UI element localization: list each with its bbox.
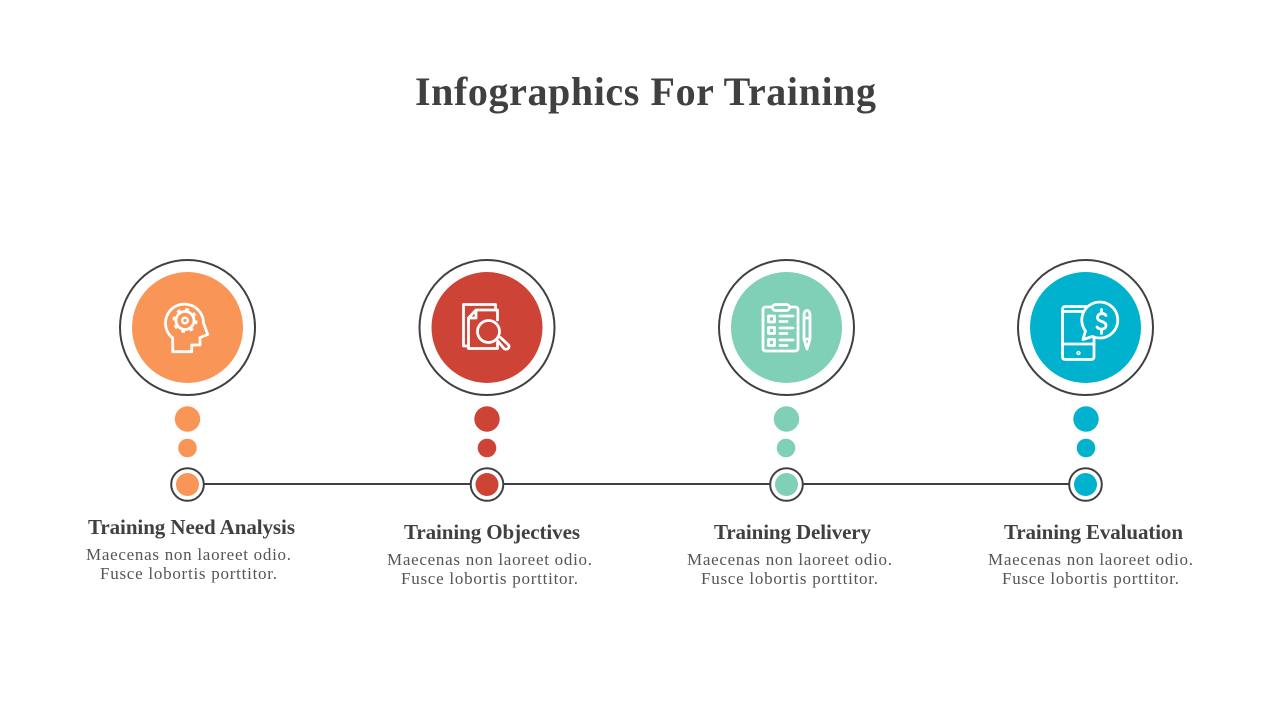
step 4: training evaluation xyxy=(988,260,1193,588)
heading: Training Objectives xyxy=(404,520,580,544)
description: Fusce lobortis porttitor. xyxy=(401,569,578,588)
description: Fusce lobortis porttitor. xyxy=(1002,569,1179,588)
step 1: training need analysis xyxy=(86,260,295,583)
heading: Training Delivery xyxy=(714,520,872,544)
description: Maecenas non laoreet odio. xyxy=(86,545,291,564)
timeline node xyxy=(1069,468,1102,501)
step 3: training delivery xyxy=(687,260,892,588)
description: Maecenas non laoreet odio. xyxy=(387,550,592,569)
heading: Training Need Analysis xyxy=(88,515,295,539)
heading: Training Evaluation xyxy=(1004,520,1183,544)
timeline line xyxy=(187,483,1086,485)
description: Maecenas non laoreet odio. xyxy=(988,550,1193,569)
description xyxy=(988,550,1193,588)
description xyxy=(86,545,291,583)
timeline node xyxy=(171,468,204,501)
icon: documents with magnifier xyxy=(464,304,509,349)
connector dots xyxy=(774,406,799,457)
timeline node xyxy=(471,468,503,501)
description xyxy=(387,550,592,588)
icon circle: green xyxy=(719,260,854,395)
icon circle: red xyxy=(420,260,554,395)
step 2: training objectives xyxy=(387,260,592,588)
icon: phone with dollar bubble xyxy=(1062,302,1118,360)
connector dots xyxy=(175,406,200,457)
title: Infographics For Training xyxy=(415,69,876,114)
description xyxy=(687,550,892,588)
timeline node xyxy=(770,468,803,501)
icon: clipboard and pencil xyxy=(763,304,810,351)
icon: head with gear xyxy=(166,304,208,352)
icon circle: orange xyxy=(120,260,255,395)
description: Maecenas non laoreet odio. xyxy=(687,550,892,569)
icon circle: blue xyxy=(1018,260,1153,395)
connector dots xyxy=(1073,406,1099,457)
description: Fusce lobortis porttitor. xyxy=(701,569,878,588)
connector dots xyxy=(474,406,500,457)
description: Fusce lobortis porttitor. xyxy=(100,564,277,583)
